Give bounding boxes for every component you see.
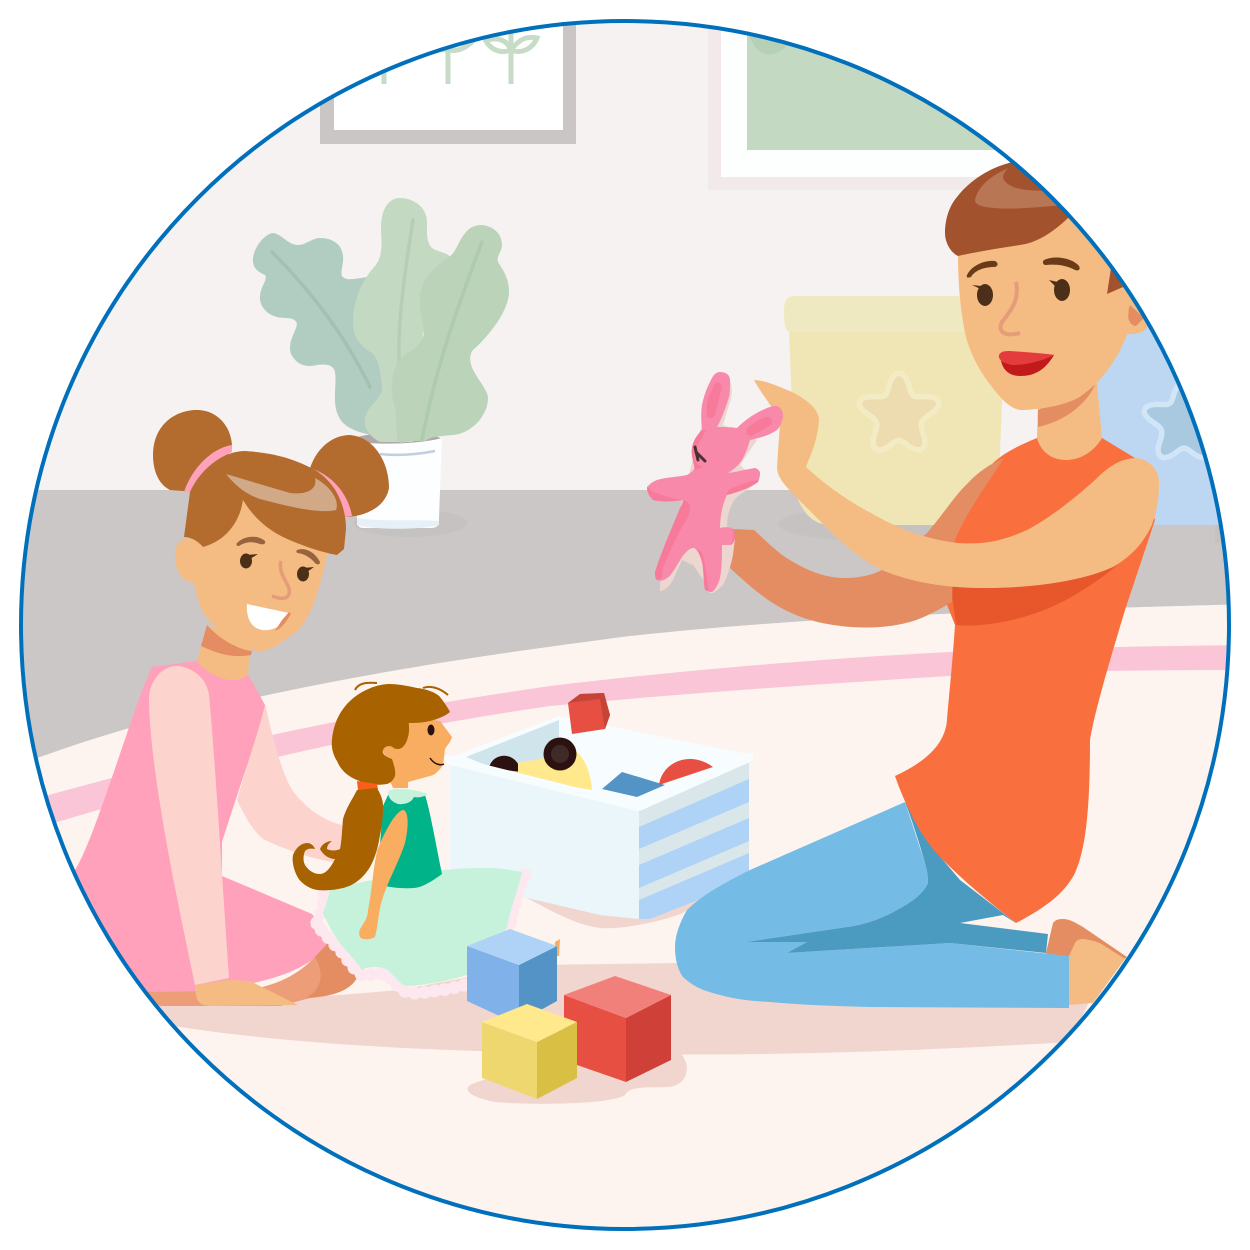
doll torso xyxy=(377,795,442,888)
red block xyxy=(564,976,671,1082)
eyebrows xyxy=(236,537,320,564)
doll fringe strands xyxy=(355,683,448,695)
doll arm xyxy=(359,810,408,939)
blue block xyxy=(467,929,557,1025)
hair xyxy=(184,451,346,555)
doll hair xyxy=(332,684,450,785)
yellow block xyxy=(482,1004,577,1099)
toy blocks xyxy=(467,929,687,1104)
block shadow xyxy=(468,1053,687,1104)
box front xyxy=(450,762,639,919)
neck xyxy=(197,625,250,681)
nose xyxy=(272,561,289,598)
eyebrows xyxy=(967,258,1080,278)
dress xyxy=(75,661,328,992)
jeans shade xyxy=(746,802,1048,953)
toy box xyxy=(445,693,753,928)
toy bunny xyxy=(647,372,783,593)
eyes xyxy=(977,284,993,306)
blue toy block xyxy=(602,772,665,797)
right leaf xyxy=(392,225,509,441)
face xyxy=(958,210,1130,410)
floor shadow xyxy=(130,963,1090,1054)
mouth xyxy=(999,351,1054,376)
doll dress skirt xyxy=(323,868,522,986)
left leaf xyxy=(252,233,382,434)
dress far sleeve xyxy=(237,704,343,863)
mother xyxy=(675,150,1159,1008)
doll ponytail xyxy=(293,788,383,890)
ear xyxy=(1125,294,1149,334)
hair bands xyxy=(184,445,232,492)
middle leaf xyxy=(353,198,452,442)
blue storage basket xyxy=(1096,326,1219,525)
box rim xyxy=(445,752,753,811)
sideburn xyxy=(1107,268,1123,294)
near sleeve xyxy=(149,666,229,985)
nose xyxy=(1001,282,1020,334)
smile xyxy=(247,604,289,630)
doll smile xyxy=(430,758,444,765)
near arm and hand xyxy=(754,380,1159,588)
star xyxy=(859,374,939,450)
toy wheels and car xyxy=(489,738,592,790)
picture frame: sprouts xyxy=(320,25,576,144)
leg xyxy=(140,941,357,1006)
doll leg behind block xyxy=(554,939,560,956)
potted plant xyxy=(253,198,509,537)
neck xyxy=(1037,383,1102,460)
bunny shadow xyxy=(660,376,758,593)
hair xyxy=(945,150,1090,256)
rug xyxy=(0,604,1250,1250)
red ball xyxy=(659,759,713,785)
doll xyxy=(293,683,560,993)
picture frame: landscape xyxy=(708,29,1010,190)
girl xyxy=(75,410,389,1006)
doll collar xyxy=(388,789,428,804)
yellow storage basket xyxy=(784,296,1002,525)
eyes xyxy=(240,554,314,582)
doll ear xyxy=(383,746,395,756)
hair buns xyxy=(153,410,389,517)
pot xyxy=(358,434,442,444)
jeans xyxy=(675,802,1069,1008)
doll hair tie xyxy=(357,781,378,790)
doll eye xyxy=(428,724,434,736)
hair highlight xyxy=(975,150,1065,209)
face xyxy=(190,500,328,651)
box interior xyxy=(449,716,752,808)
near foot xyxy=(1069,939,1125,1005)
rug pink stripe xyxy=(30,645,1250,830)
far foot xyxy=(1046,919,1127,980)
hair highlight xyxy=(226,474,337,511)
ear xyxy=(175,539,195,583)
doll dress frill xyxy=(316,875,525,993)
top xyxy=(895,438,1155,923)
doll neck and face xyxy=(385,715,452,788)
far arm xyxy=(730,458,1004,628)
bunny body xyxy=(647,372,783,592)
bunny inner ears and shading xyxy=(647,382,772,591)
hand xyxy=(195,980,298,1006)
box side xyxy=(639,762,749,900)
red cube in the air xyxy=(568,693,610,734)
baseboard wall band xyxy=(23,490,1227,758)
top shade xyxy=(951,512,1156,625)
wall xyxy=(38,23,1038,490)
bunny eye xyxy=(695,447,705,461)
